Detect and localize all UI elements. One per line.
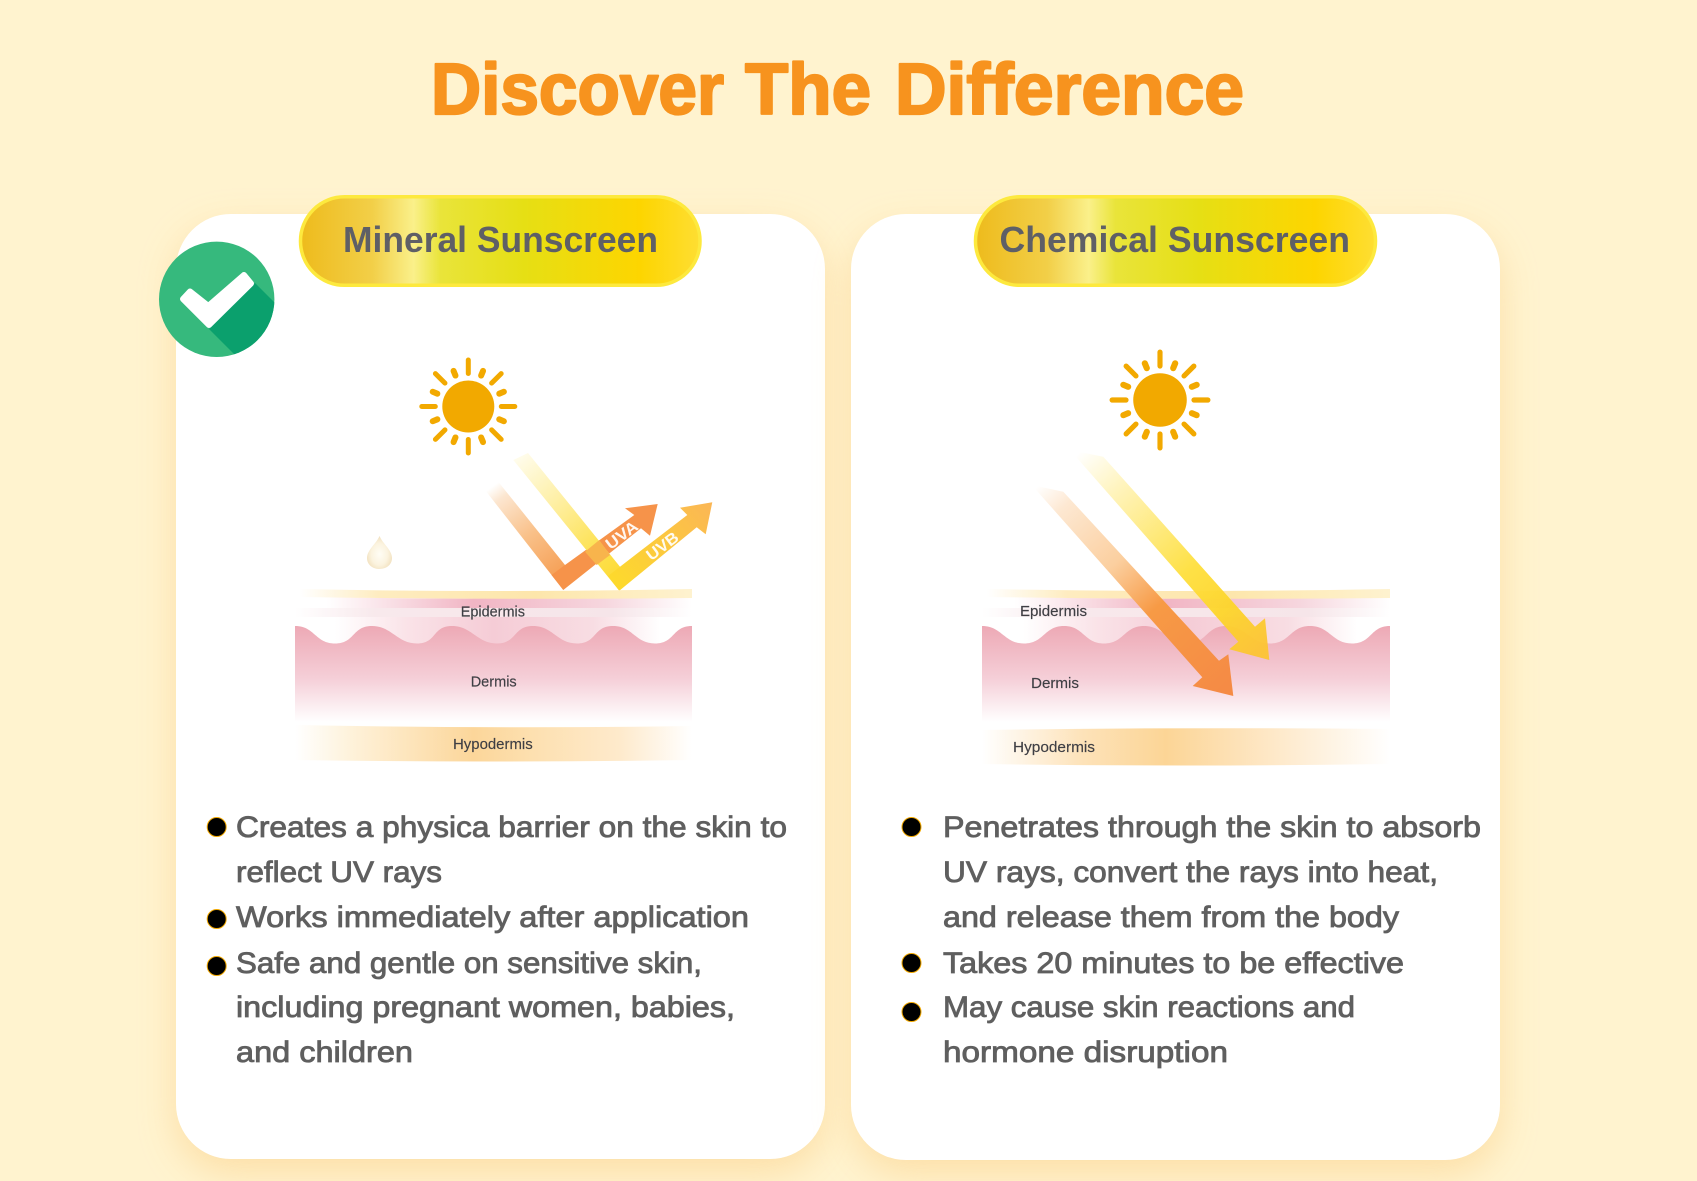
bullet list: mineral bbox=[207, 811, 787, 1069]
bullet list: chemical: Penetrates through the skin to absorb bbox=[943, 811, 1481, 844]
bullet list: chemical: and release them from the body bbox=[943, 901, 1399, 934]
diagram: skin layers: Dermis bbox=[471, 674, 517, 690]
diagram: skin layers: Epidermis bbox=[461, 604, 525, 620]
title: Difference bbox=[895, 50, 1244, 130]
bullet list: mineral: including pregnant women, babies, bbox=[236, 991, 735, 1024]
diagram: skin layers: Hypodermis bbox=[1013, 739, 1095, 756]
title: Discover bbox=[431, 50, 724, 130]
diagram: skin layers: Epidermis bbox=[1020, 603, 1087, 620]
diagram: skin layers bbox=[982, 589, 1390, 766]
icon: green check badge bbox=[159, 242, 274, 357]
heading pill: chemical sunscreen: Chemical Sunscreen bbox=[1000, 219, 1350, 260]
diagram: reflected UV arrows bbox=[485, 453, 712, 591]
bullet list: chemical: hormone disruption bbox=[943, 1036, 1228, 1069]
title: The bbox=[745, 50, 871, 130]
bullet list: mineral: and children bbox=[236, 1036, 413, 1069]
diagram: reflected UV arrows: UVB bbox=[643, 529, 682, 564]
diagram: reflected UV arrows: UVA bbox=[603, 518, 642, 553]
heading pill: chemical sunscreen bbox=[976, 197, 1376, 285]
heading pill: mineral sunscreen: Mineral Sunscreen bbox=[343, 219, 658, 260]
title bbox=[431, 50, 1244, 130]
heading pill: mineral sunscreen bbox=[300, 197, 700, 285]
diagram: penetrating UV arrows bbox=[1032, 450, 1269, 696]
bullet list: mineral: Creates a physica barrier on the skin to bbox=[236, 811, 787, 844]
icon: sun bbox=[1112, 352, 1208, 448]
diagram: skin layers bbox=[295, 589, 692, 762]
bullet list: chemical bbox=[902, 811, 1481, 1069]
bullet list: chemical: May cause skin reactions and bbox=[943, 991, 1355, 1024]
bullet list: mineral: Safe and gentle on sensitive skin, bbox=[236, 947, 702, 980]
icon: sun bbox=[422, 360, 515, 453]
icon: lotion droplet bbox=[367, 536, 392, 569]
panel: mineral sunscreen bbox=[159, 197, 825, 1173]
bullet list: chemical: Takes 20 minutes to be effective bbox=[943, 947, 1404, 980]
bullet list: mineral: reflect UV rays bbox=[236, 856, 442, 889]
diagram: skin layers: Hypodermis bbox=[453, 736, 533, 753]
bullet list: mineral: Works immediately after application bbox=[236, 901, 749, 934]
bullet list: chemical: UV rays, convert the rays into heat, bbox=[943, 856, 1438, 889]
panel: chemical sunscreen bbox=[851, 197, 1500, 1174]
diagram: skin layers: Dermis bbox=[1031, 675, 1079, 692]
